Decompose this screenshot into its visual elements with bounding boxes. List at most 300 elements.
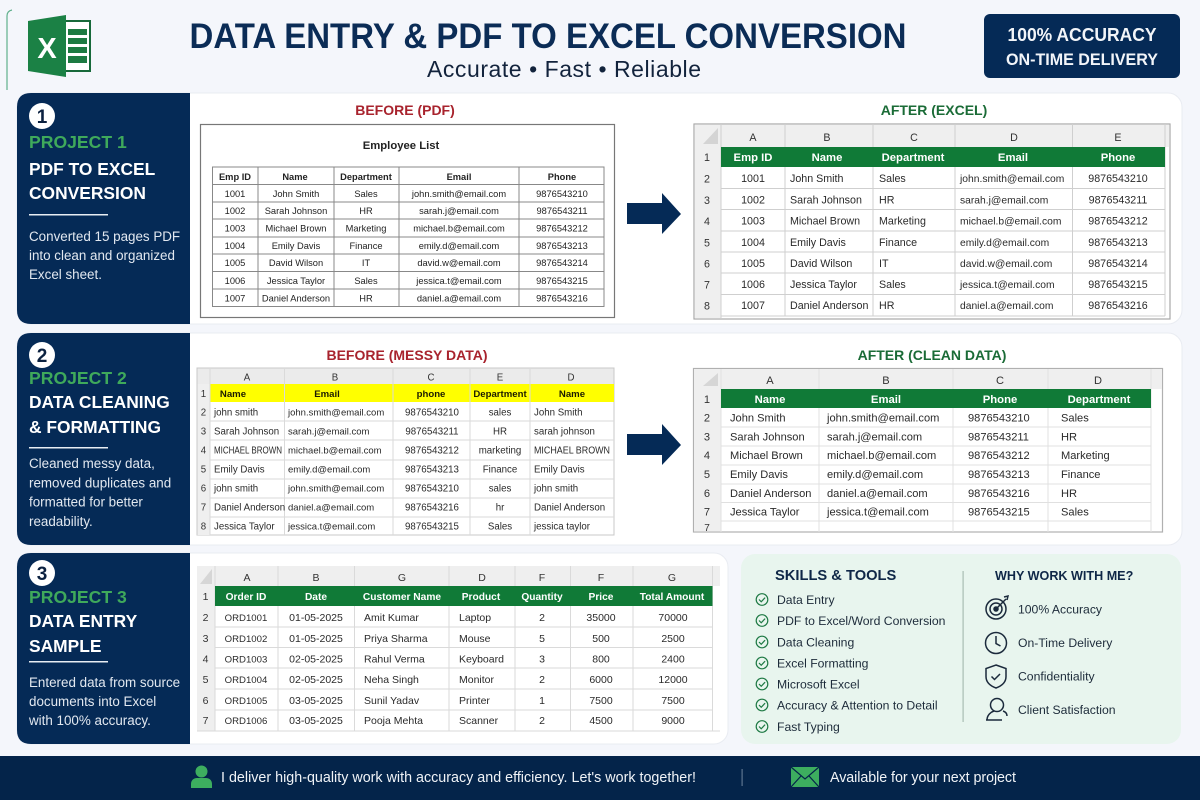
- table: PDF employee list: 1006: [225, 276, 245, 286]
- table: PDF employee list: Department: [340, 172, 392, 182]
- table: order data entry: ORD1005: [225, 696, 267, 707]
- table: messy data: MICHAEL BROWN: [534, 446, 610, 456]
- skills checklist: [756, 593, 945, 734]
- table: Excel employee list: Phone: [1101, 152, 1135, 164]
- project 2 description: readability.: [29, 514, 93, 529]
- table: Excel employee list: john.smith@email.com: [959, 174, 1064, 185]
- table: clean data: Sarah Johnson: [730, 432, 805, 444]
- table: messy data: 5: [201, 464, 206, 476]
- table: messy data: john smith: [213, 408, 258, 418]
- project 2 description: removed duplicates and: [29, 476, 171, 490]
- table: clean data: Emily Davis: [730, 469, 788, 481]
- table: messy data: daniel.a@email.com: [288, 502, 374, 514]
- table: order data entry: 2: [203, 612, 209, 624]
- table: Excel employee list: 6: [704, 258, 710, 270]
- table: clean data: D: [1094, 375, 1102, 387]
- table: order data entry: Customer Name: [363, 592, 441, 603]
- table: order data entry: Keyboard: [459, 654, 504, 666]
- heading: after clean data: AFTER (CLEAN DATA): [858, 347, 1006, 363]
- table: clean data: Finance: [1061, 469, 1100, 481]
- table: Excel employee list: D: [1010, 132, 1018, 144]
- project 1 heading: [29, 159, 156, 203]
- table: clean data: 9876543212: [968, 450, 1030, 462]
- table: messy data: sarah.j@email.com: [288, 426, 370, 438]
- project 2 number badge: [29, 342, 55, 368]
- table: clean data: Phone: [983, 394, 1017, 406]
- table: order data entry: Priya Sharma: [364, 633, 428, 645]
- table: Excel employee list: Sales: [879, 279, 906, 291]
- table: PDF employee list: Sarah Johnson: [265, 206, 327, 216]
- project 3 description: documents into Excel: [29, 694, 156, 709]
- heading: before PDF: BEFORE (PDF): [355, 102, 455, 118]
- table: Excel employee list: 1003: [741, 216, 765, 228]
- table: clean data: 7: [704, 523, 710, 534]
- table: PDF employee list: 1007: [225, 294, 245, 304]
- skills checklist: Excel Formatting: [777, 656, 868, 670]
- table: clean data: 9876543211: [968, 432, 1029, 444]
- table: clean data: emily.d@email.com: [827, 469, 923, 481]
- table: Excel employee list: sarah.j@email.com: [960, 196, 1048, 206]
- arrow: messy to clean: [627, 424, 681, 465]
- table: messy data: Name: [559, 389, 585, 400]
- table: order data entry: Pooja Mehta: [364, 715, 423, 727]
- table: messy data: HR: [493, 426, 507, 438]
- table: Excel employee list: 8: [704, 300, 710, 312]
- project 3 heading: DATA ENTRY: [29, 611, 138, 631]
- table: PDF employee list: John Smith: [273, 189, 319, 199]
- table: Excel employee list: david.w@email.com: [960, 259, 1052, 270]
- table: PDF employee list: 1005: [225, 258, 245, 268]
- table: messy data: 9876543215: [405, 522, 459, 532]
- table: Excel employee list: IT: [879, 258, 889, 270]
- table: clean data: Sales: [1061, 506, 1089, 518]
- table: clean data: Michael Brown: [730, 450, 803, 462]
- table: messy data: 1: [201, 389, 206, 400]
- project 1 description: into clean and organized: [29, 248, 175, 263]
- table: order data entry: 9000: [661, 715, 685, 727]
- table: order data entry: Product: [462, 592, 501, 603]
- table: Excel employee list: Sarah Johnson: [790, 194, 862, 206]
- project 2 heading: DATA CLEANING: [29, 392, 170, 412]
- table: order data entry: 1: [539, 695, 545, 707]
- project 3 label: PROJECT 3: [29, 587, 127, 607]
- table: clean data: 5: [704, 469, 710, 481]
- footer message: I deliver high-quality work with accuracy and efficiency. Let's work together!: [221, 770, 696, 786]
- table: PDF employee list: daniel.a@email.com: [417, 294, 501, 304]
- project 2 description: Cleaned messy data,: [29, 456, 155, 471]
- table: messy data: A: [244, 372, 251, 384]
- panel: project 3: [17, 553, 728, 744]
- arrow: PDF to Excel: [627, 193, 681, 234]
- project 2 number badge: 2: [37, 346, 47, 367]
- table: messy data: 8: [201, 522, 206, 532]
- table: order data entry: B: [312, 572, 320, 584]
- table: PDF employee list: Daniel Anderson: [262, 294, 330, 304]
- table: order data entry: 2: [539, 715, 545, 727]
- table: PDF employee list: [200, 124, 614, 318]
- table: PDF employee list: 1002: [225, 206, 245, 216]
- table: order data entry: Date: [305, 592, 327, 603]
- table: clean data: HR: [1061, 432, 1077, 444]
- table: order data entry: 02-05-2025: [289, 674, 343, 686]
- icon: clock: [986, 632, 1006, 654]
- table: clean data: michael.b@email.com: [827, 450, 936, 462]
- table: Excel employee list: 9876543210: [1088, 173, 1148, 185]
- table: order data entry: 2400: [661, 654, 685, 666]
- table: Excel employee list: HR: [879, 300, 895, 312]
- table: messy data: sales: [489, 484, 511, 494]
- table: PDF employee list: 1003: [225, 224, 245, 234]
- table: Excel employee list: michael.b@email.com: [960, 216, 1061, 228]
- table: Excel employee list: Michael Brown: [790, 216, 860, 228]
- table: PDF employee list: 9876543211: [536, 206, 588, 216]
- table: messy data: marketing: [479, 446, 521, 456]
- table: order data entry: 70000: [658, 612, 688, 624]
- table: clean data: Email: [871, 394, 901, 406]
- table: Excel employee list: David Wilson: [790, 258, 852, 270]
- table: order data entry: Price: [589, 592, 614, 603]
- project 3 description: with 100% accuracy.: [28, 713, 151, 728]
- table: Excel employee list: Sales: [879, 173, 906, 185]
- table: messy data: 4: [201, 446, 207, 456]
- availability message: Available for your next project: [830, 770, 1016, 786]
- table: clean data: Department: [1068, 394, 1131, 406]
- table: Excel employee list: 4: [704, 216, 710, 228]
- table: order data entry: 7500: [589, 695, 613, 707]
- table: Excel employee list: 1006: [741, 279, 765, 291]
- table: order data entry: G: [668, 572, 676, 584]
- table: PDF employee list: David Wilson: [269, 258, 323, 268]
- table: order data entry: 2: [539, 612, 545, 624]
- table: PDF employee list: Name: [282, 172, 308, 182]
- table: order data entry: Monitor: [459, 674, 495, 686]
- heading: skills and tools: SKILLS & TOOLS: [775, 568, 897, 584]
- table: clean data: 3: [704, 432, 710, 444]
- project 3 heading: SAMPLE: [29, 636, 101, 656]
- table: order data entry: 2500: [661, 633, 685, 645]
- table: clean data: 9876543213: [968, 469, 1030, 481]
- table: messy data: jessica.t@email.com: [287, 522, 375, 532]
- project 2 description: formatted for better: [29, 494, 143, 510]
- table: messy data: 2: [201, 408, 206, 418]
- skills checklist: Data Cleaning: [777, 636, 854, 650]
- table: order data entry: 500: [592, 633, 610, 645]
- heading: before messy data: BEFORE (MESSY DATA): [326, 347, 488, 363]
- table: order data entry: 01-05-2025: [289, 612, 343, 624]
- table: clean data: 7: [704, 506, 710, 518]
- icon: Excel logo: [7, 10, 90, 90]
- table: messy data: [197, 368, 614, 535]
- project 1 description: [29, 229, 180, 282]
- table: order data entry: ORD1001: [225, 613, 267, 624]
- table: order data entry: 4500: [589, 715, 613, 727]
- project 2 label: PROJECT 2: [29, 368, 127, 388]
- table: PDF employee list: Finance: [349, 241, 383, 251]
- table: Excel employee list: A: [749, 132, 757, 144]
- table: messy data: john.smith@email.com: [287, 484, 384, 494]
- subtitle: Accurate • Fast • Reliable: [427, 56, 701, 82]
- table: order data entry: [197, 566, 720, 731]
- table: Excel employee list: jessica.t@email.com: [959, 280, 1055, 291]
- table: order data entry: 6: [203, 695, 209, 707]
- table: order data entry: 7500: [661, 695, 685, 707]
- icon: target: [986, 596, 1008, 619]
- client satisfaction label: Client Satisfaction: [1018, 703, 1116, 717]
- icon: envelope: [791, 767, 819, 787]
- table: order data entry: 03-05-2025: [289, 695, 343, 707]
- footer bar: [0, 756, 1200, 800]
- table: Excel employee list: Jessica Taylor: [790, 279, 857, 291]
- table: PDF employee list: Emily Davis: [272, 241, 321, 251]
- table: order data entry: F: [598, 572, 604, 584]
- table: clean data: 9876543210: [968, 412, 1030, 424]
- table: Excel employee list: B: [823, 132, 831, 144]
- table: Excel employee list: John Smith: [790, 173, 844, 185]
- table: Excel employee list: 9876543215: [1088, 279, 1148, 291]
- table: PDF employee list: jessica.t@email.com: [415, 276, 502, 286]
- project 1 description: Excel sheet.: [29, 267, 102, 282]
- table: Excel employee list: 2: [704, 174, 710, 186]
- table: messy data: John Smith: [534, 408, 582, 418]
- table: messy data: Email: [314, 389, 340, 400]
- table: order data entry: 1: [203, 591, 209, 603]
- icon: person: [191, 766, 212, 788]
- table: PDF employee list: 9876543212: [536, 224, 588, 234]
- on-time label: On-Time Delivery: [1018, 636, 1113, 650]
- table: clean data: B: [882, 375, 890, 387]
- table: messy data: Finance: [483, 464, 517, 476]
- skills checklist: Data Entry: [777, 593, 835, 607]
- table: order data entry: Printer: [459, 695, 490, 707]
- panel: skills and why work with me: [741, 554, 1181, 744]
- table: Excel employee list: C: [910, 132, 918, 144]
- table: Excel employee list: 1: [704, 152, 710, 164]
- panel: project 2: [17, 333, 1182, 545]
- table: order data entry: Order ID: [226, 592, 266, 603]
- table: order data entry: Total Amount: [640, 592, 705, 603]
- table: messy data: C: [428, 372, 434, 384]
- table: clean data: Sales: [1061, 412, 1089, 424]
- table: PDF employee list: 9876543210: [536, 189, 588, 199]
- project 1 heading: CONVERSION: [29, 183, 146, 203]
- heading: why work with me: WHY WORK WITH ME?: [995, 569, 1133, 583]
- icon: Excel logo: X: [37, 33, 57, 65]
- table: Excel employee list: Marketing: [879, 216, 926, 228]
- table: messy data: sarah johnson: [534, 426, 595, 438]
- project 3 heading: [29, 611, 138, 656]
- table: messy data: 9876543212: [405, 446, 459, 456]
- table: clean data: Name: [755, 394, 785, 406]
- table: messy data: Daniel Anderson: [214, 502, 285, 514]
- confidentiality label: Confidentiality: [1018, 670, 1095, 684]
- project 3 number badge: 3: [37, 564, 47, 585]
- table: PDF employee list: emily.d@email.com: [419, 241, 500, 251]
- table: Excel employee list: [694, 124, 1170, 319]
- table: order data entry: 3: [203, 633, 209, 645]
- table: Excel employee list: Emp ID: [734, 152, 772, 164]
- table: PDF employee list: 9876543215: [536, 276, 588, 286]
- table: PDF employee list: Phone: [548, 172, 576, 182]
- table: clean data: 4: [704, 450, 710, 462]
- table: PDF employee list: Sales: [354, 189, 378, 199]
- table: PDF employee list: Emp ID: [219, 172, 251, 182]
- table: Excel employee list: E: [1114, 132, 1122, 144]
- project 1 heading: PDF TO EXCEL: [29, 159, 156, 179]
- table: order data entry: 3: [539, 654, 545, 666]
- skills checklist: Microsoft Excel: [777, 678, 860, 692]
- table: order data entry: 5: [203, 674, 209, 686]
- table: order data entry: ORD1002: [225, 634, 267, 645]
- project 2 description: [29, 456, 171, 529]
- table: Excel employee list: Finance: [879, 237, 917, 249]
- table: Excel employee list: 9876543214: [1088, 258, 1148, 270]
- table: clean data: 9876543215: [968, 506, 1030, 518]
- skills checklist: Fast Typing: [777, 720, 840, 734]
- table: order data entry: D: [478, 572, 486, 584]
- table: clean data: HR: [1061, 488, 1077, 500]
- heading: after Excel: AFTER (EXCEL): [881, 102, 987, 118]
- table: messy data: phone: [417, 389, 445, 400]
- table: Excel employee list: Daniel Anderson: [790, 300, 868, 312]
- table: PDF employee list: HR: [359, 206, 373, 216]
- table: messy data: 9876543216: [405, 502, 459, 514]
- table: clean data: Marketing: [1061, 450, 1110, 462]
- accuracy label: 100% Accuracy: [1018, 602, 1103, 616]
- table: Excel employee list: 1007: [741, 300, 765, 312]
- table: clean data: John Smith: [730, 412, 786, 424]
- table: messy data: Sarah Johnson: [214, 426, 279, 438]
- table: order data entry: 2: [539, 674, 545, 686]
- table: Excel employee list: Email: [998, 152, 1028, 164]
- table: Excel employee list: Name: [812, 152, 842, 164]
- table: order data entry: G: [398, 572, 406, 584]
- table: Excel employee list: daniel.a@email.com: [960, 301, 1053, 312]
- table: messy data: hr: [496, 502, 505, 514]
- table: PDF employee list: john.smith@email.com: [411, 189, 506, 199]
- table: order data entry: 02-05-2025: [289, 654, 343, 666]
- table: Excel employee list: 9876543213: [1088, 237, 1148, 249]
- skills checklist: Accuracy & Attention to Detail: [777, 698, 938, 712]
- table: PDF employee list: Michael Brown: [266, 224, 326, 234]
- table: order data entry: 6000: [589, 674, 613, 686]
- table: messy data: emily.d@email.com: [288, 464, 370, 476]
- table: Excel employee list: HR: [879, 194, 895, 206]
- table: PDF employee list: HR: [359, 294, 373, 304]
- table: messy data: john smith: [533, 484, 578, 494]
- project 1 number badge: 1: [37, 107, 48, 128]
- skills checklist: PDF to Excel/Word Conversion: [777, 614, 945, 628]
- project 3 description: Entered data from source: [29, 675, 180, 690]
- table: Excel employee list: 9876543216: [1088, 300, 1148, 312]
- table: order data entry: Rahul Verma: [364, 654, 425, 666]
- table: messy data: E: [497, 372, 504, 384]
- table: PDF employee list: Marketing: [346, 224, 386, 234]
- table: PDF employee list: 9876543213: [536, 241, 588, 251]
- table: order data entry: A: [243, 572, 251, 584]
- table: PDF employee list: Employee List: [363, 140, 440, 152]
- table: clean data: daniel.a@email.com: [827, 488, 928, 500]
- table: PDF employee list: david.w@email.com: [417, 258, 501, 268]
- icon: client: [986, 698, 1007, 720]
- table: order data entry: 7: [203, 715, 209, 727]
- table: clean data: Daniel Anderson: [730, 488, 811, 500]
- table: order data entry: ORD1004: [225, 675, 268, 686]
- badge: accuracy and delivery: [984, 14, 1180, 78]
- table: clean data: sarah.j@email.com: [827, 432, 922, 444]
- project 1 label: PROJECT 1: [29, 132, 127, 152]
- table: Excel employee list: 1002: [741, 194, 765, 206]
- table: Excel employee list: 1001: [741, 173, 765, 185]
- table: clean data: [694, 368, 1162, 534]
- table: order data entry: ORD1006: [225, 716, 267, 727]
- table: PDF employee list: Sales: [354, 276, 378, 286]
- project 2 heading: [29, 392, 170, 437]
- table: clean data: 2: [704, 412, 710, 424]
- title: DATA ENTRY & PDF TO EXCEL CONVERSION: [190, 17, 906, 56]
- table: Excel employee list: 7: [704, 280, 710, 292]
- table: PDF employee list: Jessica Taylor: [267, 276, 325, 286]
- table: messy data: Name: [220, 389, 246, 400]
- table: order data entry: Mouse: [459, 633, 491, 645]
- badge: accuracy and delivery: 100% ACCURACY: [1008, 25, 1156, 45]
- table: PDF employee list: Email: [447, 172, 471, 182]
- table: order data entry: Laptop: [459, 612, 491, 624]
- table: PDF employee list: 1004: [225, 241, 245, 251]
- project 3 description: [28, 675, 180, 728]
- table: PDF employee list: 1001: [225, 189, 245, 199]
- table: Excel employee list: 5: [704, 238, 710, 250]
- table: clean data: jessica.t@email.com: [826, 506, 929, 518]
- project 2 heading: & FORMATTING: [29, 417, 161, 437]
- table: messy data: john.smith@email.com: [287, 408, 384, 418]
- table: Excel employee list: Department: [882, 152, 945, 164]
- table: messy data: Sales: [488, 522, 512, 532]
- table: order data entry: 800: [592, 654, 610, 666]
- table: order data entry: Scanner: [459, 715, 499, 727]
- table: messy data: Jessica Taylor: [214, 522, 275, 532]
- badge: accuracy and delivery: ON-TIME DELIVERY: [1006, 50, 1159, 69]
- table: order data entry: Neha Singh: [364, 674, 419, 686]
- table: order data entry: ORD1003: [225, 654, 267, 666]
- table: messy data: Department: [473, 389, 527, 400]
- table: messy data: 9876543210: [405, 408, 460, 418]
- icon: shield: [986, 665, 1006, 688]
- table: PDF employee list: 9876543216: [536, 294, 588, 304]
- table: order data entry: Quantity: [521, 592, 563, 603]
- project 3 number badge: [29, 560, 55, 586]
- table: order data entry: 03-05-2025: [289, 715, 343, 727]
- table: order data entry: 12000: [658, 674, 688, 686]
- table: Excel employee list: Emily Davis: [790, 237, 846, 249]
- table: messy data: michael.b@email.com: [288, 446, 382, 456]
- table: clean data: 6: [704, 488, 710, 500]
- table: order data entry: 35000: [586, 612, 616, 624]
- table: messy data: 3: [201, 426, 206, 438]
- table: clean data: john.smith@email.com: [826, 412, 939, 424]
- table: order data entry: F: [539, 572, 545, 584]
- project 1 number badge: [29, 103, 55, 129]
- table: PDF employee list: michael.b@email.com: [413, 224, 505, 234]
- table: messy data: Daniel Anderson: [534, 502, 605, 514]
- table: messy data: 6: [201, 484, 206, 494]
- table: messy data: 9876543210: [405, 484, 460, 494]
- panel: project 1: [17, 93, 1182, 324]
- table: Excel employee list: emily.d@email.com: [960, 238, 1049, 249]
- table: order data entry: 5: [539, 633, 545, 645]
- table: clean data: 1: [704, 394, 710, 406]
- table: order data entry: 01-05-2025: [289, 633, 343, 645]
- table: messy data: 9876543211: [405, 426, 459, 438]
